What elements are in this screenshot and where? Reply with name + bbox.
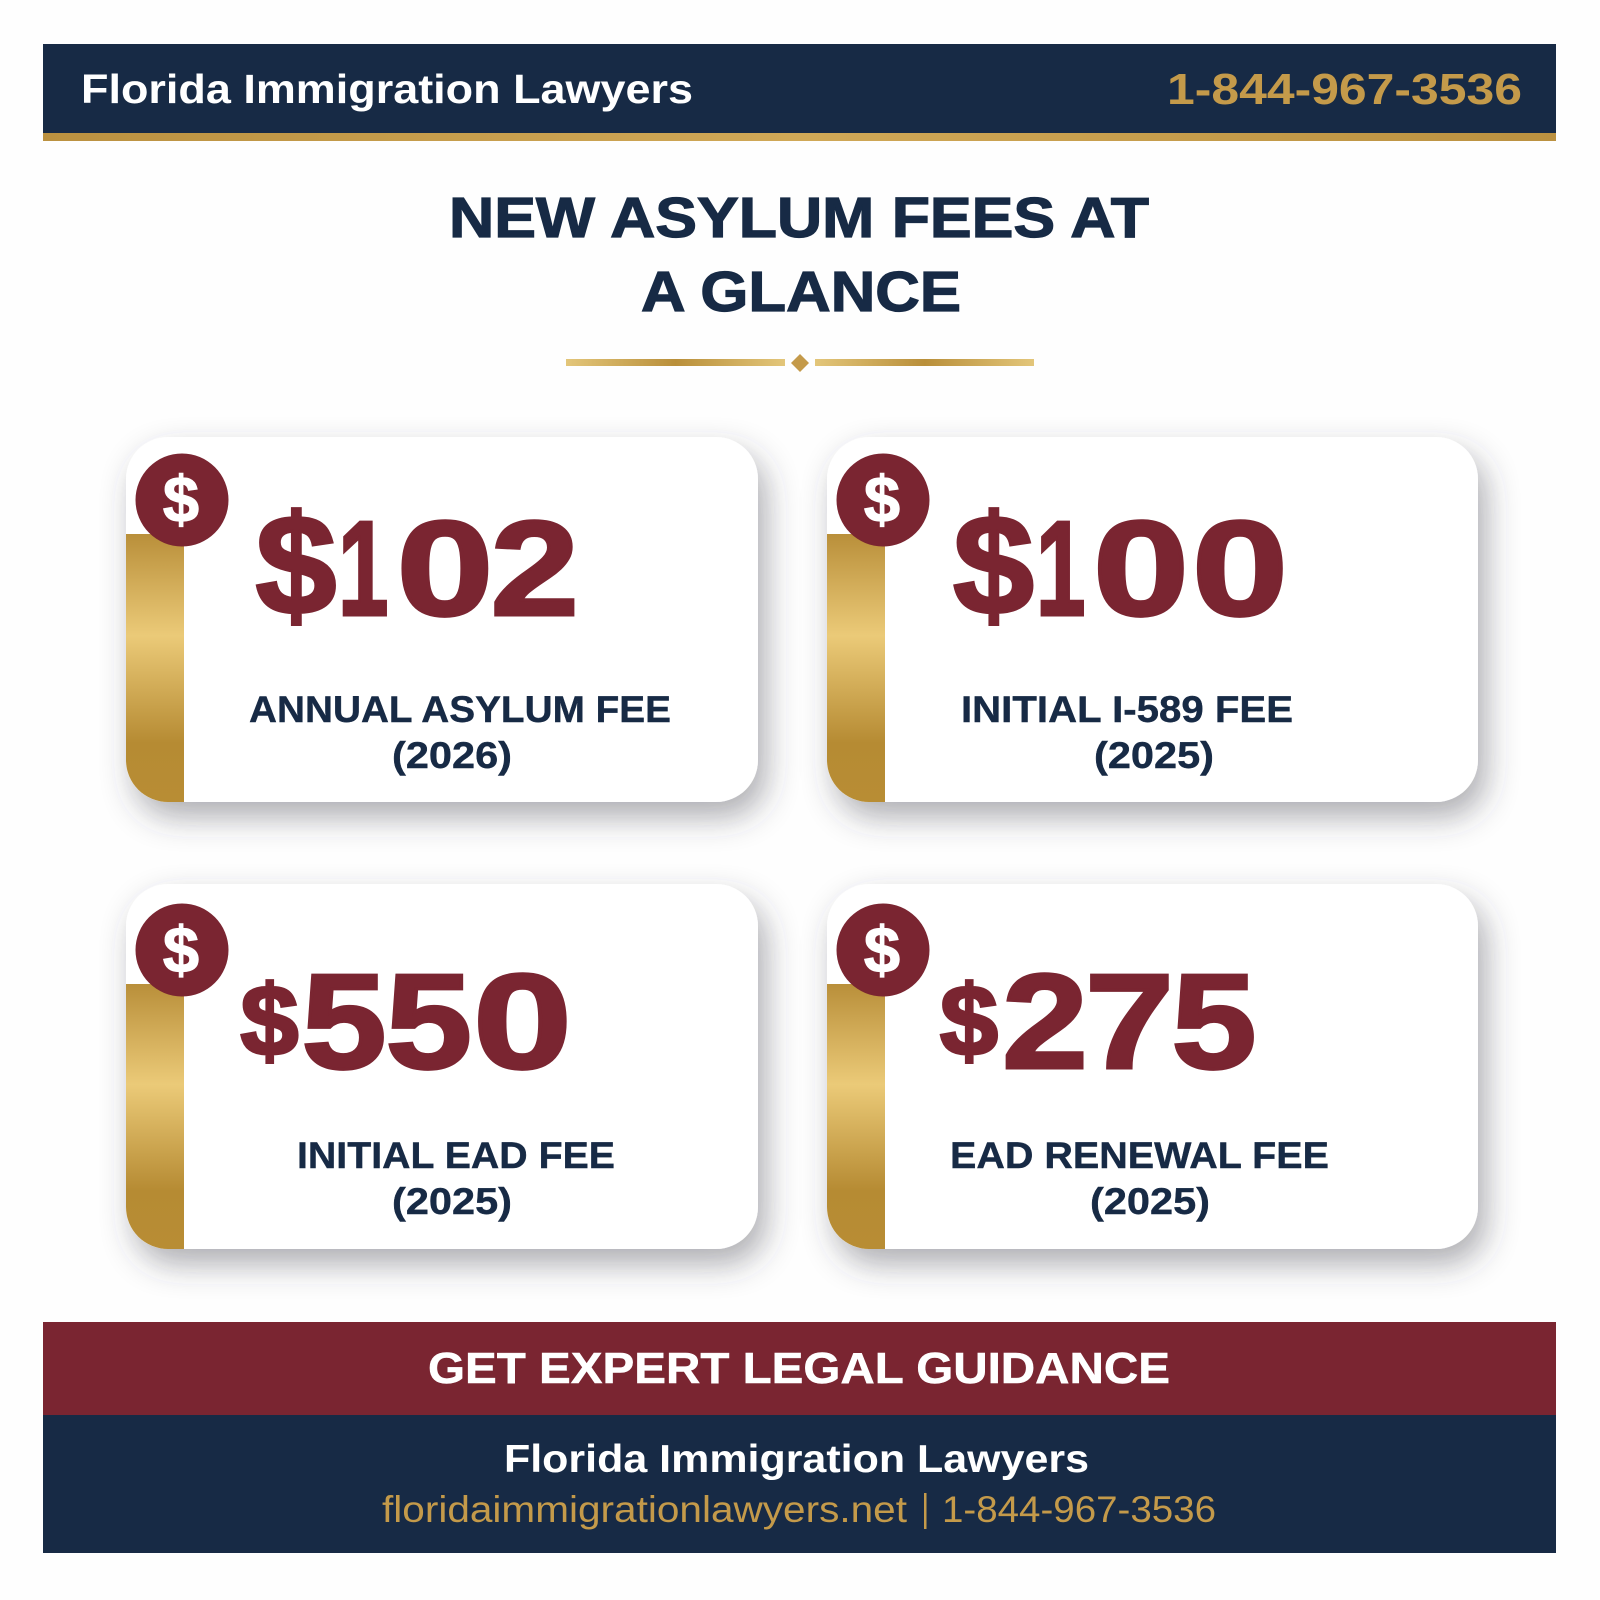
fee amount: 5: [1172, 946, 1256, 1097]
icon: dollar badge: [836, 904, 930, 996]
card: annual asylum fee: [126, 437, 758, 802]
fee label: [297, 1135, 615, 1222]
fee amount: 1: [338, 493, 388, 644]
fee amount: 0: [1192, 493, 1288, 644]
icon: dollar badge: $: [163, 913, 199, 986]
footer website and phone: 1-844-967-3536: [942, 1489, 1216, 1530]
fee label: EAD RENEWAL FEE: [950, 1135, 1329, 1176]
fee amount: 5: [386, 946, 472, 1097]
fee amount: 0: [1093, 493, 1189, 644]
header firm name: Florida Immigration Lawyers: [81, 66, 693, 112]
title divider with diamond: [566, 354, 1034, 372]
fee label: [961, 689, 1293, 776]
card: initial EAD fee: [126, 884, 758, 1249]
fee amount: $: [240, 965, 298, 1077]
fee label: (2025): [392, 1181, 512, 1222]
fee amount: 5: [302, 946, 386, 1097]
icon: dollar badge: [136, 904, 228, 996]
icon: dollar badge: $: [163, 462, 199, 536]
icon: dollar badge: [136, 454, 228, 546]
fee label: INITIAL EAD FEE: [297, 1135, 615, 1176]
footer website and phone: floridaimmigrationlawyers.net: [382, 1489, 908, 1530]
card: initial I-589 fee: [827, 437, 1478, 802]
icon: dollar badge: [836, 454, 930, 546]
fee amount: 0: [396, 493, 494, 644]
fee amount: $: [940, 965, 998, 1077]
header bar: [43, 44, 1556, 141]
card: EAD renewal fee: [827, 884, 1478, 1249]
fee label: (2025): [1090, 1181, 1210, 1222]
call to action banner: [43, 1322, 1556, 1415]
fee label: (2026): [392, 735, 512, 776]
fee amount: 7: [1085, 946, 1174, 1097]
fee amount: 0: [473, 946, 572, 1097]
footer contact panel: [43, 1415, 1556, 1553]
fee label: [950, 1135, 1329, 1222]
fee label: ANNUAL ASYLUM FEE: [249, 689, 671, 730]
footer firm name: Florida Immigration Lawyers: [504, 1438, 1089, 1481]
fee amount: $: [256, 486, 336, 645]
call to action banner: GET EXPERT LEGAL GUIDANCE: [428, 1344, 1170, 1393]
fee amount: 1: [1036, 493, 1086, 644]
fee label: INITIAL I-589 FEE: [961, 689, 1293, 730]
fee amount: $: [953, 486, 1034, 645]
footer website and phone: [382, 1489, 1216, 1530]
icon: dollar badge: $: [864, 913, 900, 986]
icon: dollar badge: $: [864, 462, 900, 536]
fee amount: 2: [490, 493, 579, 644]
fee label: (2025): [1094, 735, 1214, 776]
title: NEW ASYLUM FEES AT: [449, 186, 1149, 250]
header phone number: 1-844-967-3536: [1167, 65, 1522, 114]
title: [449, 186, 1149, 324]
fee amount: 2: [1002, 946, 1088, 1097]
fee label: [249, 689, 671, 776]
title: A GLANCE: [641, 260, 961, 324]
